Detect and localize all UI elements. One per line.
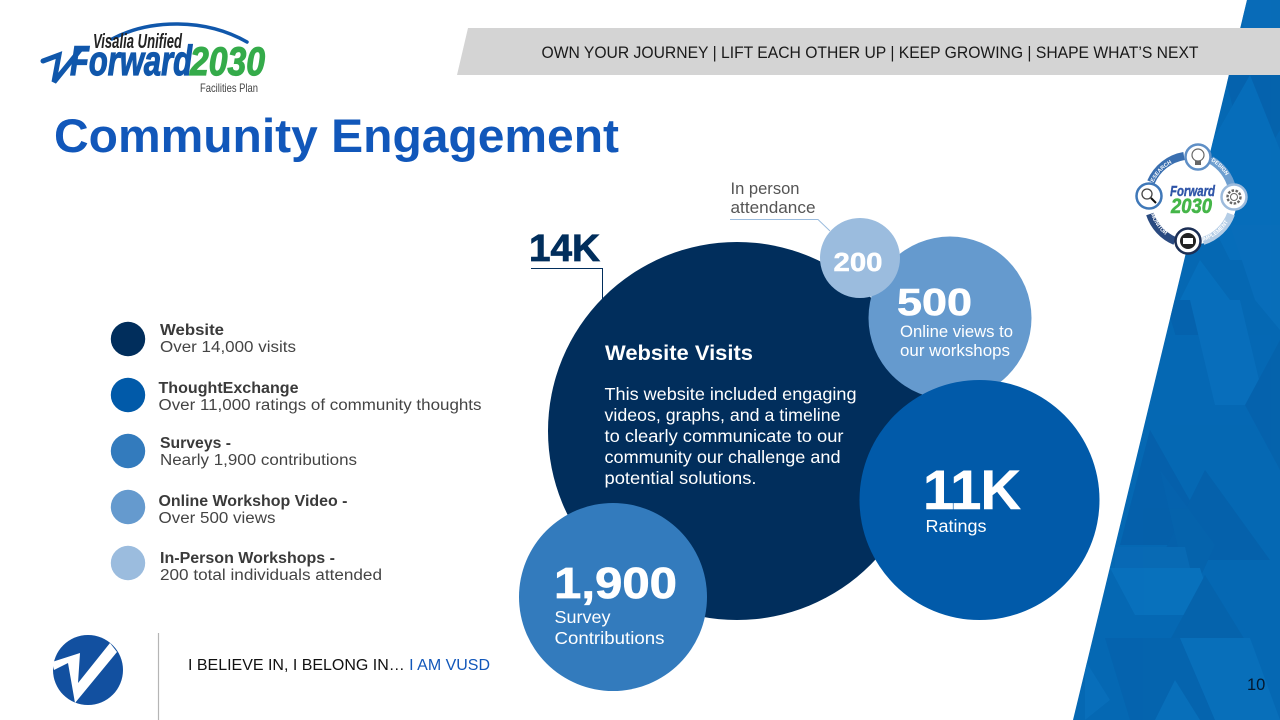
- website visits description: potential solutions.: [604, 468, 756, 488]
- callout: 14K: 14K: [529, 228, 601, 270]
- logo: Visalia Unified Forward2030 Facilities Plan: [43, 24, 265, 95]
- bubble: online views: Online views to: [900, 323, 1013, 341]
- bubble: ratings 11K: [860, 380, 1100, 620]
- website visits description: videos, graphs, and a timeline: [604, 405, 840, 425]
- legend item: in-person workshops: [111, 546, 382, 584]
- bubble: in person attendance 200: 200: [834, 247, 882, 277]
- legend item: website: [111, 322, 296, 356]
- logo: Visalia Unified Forward2030 Facilities Plan: Visalia Unified: [93, 31, 183, 53]
- legend item: surveys: [111, 434, 357, 469]
- magnifier node: [1136, 184, 1162, 208]
- ring labels: [1150, 158, 1229, 241]
- bubble: ratings 11K: 11K: [923, 458, 1021, 521]
- bubble: survey contributions: Survey: [554, 607, 611, 627]
- legend item: in-person workshops: In-Person Workshops -: [160, 550, 335, 567]
- banner: gray motto bar: [457, 28, 1280, 75]
- page number: 10: [1247, 676, 1265, 694]
- callout: in person attendance: attendance: [730, 199, 816, 217]
- bubble: online views: our workshops: [900, 342, 1010, 360]
- gear node: [1222, 184, 1246, 210]
- logo: Visalia Unified Forward2030 Facilities Plan: Facilities Plan: [200, 81, 258, 95]
- bubble: online views: [868, 236, 1032, 400]
- website visits description: community our challenge and: [604, 447, 840, 467]
- legend item: surveys: Surveys -: [160, 435, 231, 452]
- logo: Visalia Unified Forward2030 Facilities Plan: 2030: [189, 40, 265, 84]
- bulb node: [1186, 144, 1210, 170]
- icon: Forward 2030 cycle badge: [1135, 143, 1248, 255]
- legend item: online workshop video: Over 500 views: [158, 510, 276, 527]
- bubble: ratings 11K: Ratings: [926, 516, 987, 536]
- bubble: survey contributions: [519, 503, 707, 691]
- heading: website visits: Website Visits: [605, 342, 753, 365]
- legend item: website: Over 14,000 visits: [160, 339, 296, 356]
- ring labels: IMPLEMENT: [1202, 220, 1228, 241]
- bubble: online views: 500: [897, 282, 972, 324]
- legend item: online workshop video: Online Workshop Video -: [158, 493, 348, 510]
- legend item: in-person workshops: 200 total individuals attended: [160, 567, 382, 584]
- callout: 14K: [529, 228, 602, 345]
- ring labels: MONITOR: [1151, 213, 1168, 235]
- panel: blue triangle pattern background: [1060, 0, 1280, 720]
- legend item: ThoughtExchange: [111, 378, 482, 414]
- website visits description: This website included engaging: [604, 384, 856, 404]
- ring labels: DESIGN: [1211, 158, 1229, 176]
- legend item: ThoughtExchange: Over 11,000 ratings of community thoughts: [158, 397, 482, 414]
- divider: [158, 633, 160, 720]
- legend: [111, 322, 482, 584]
- icon: Forward 2030 cycle badge: Forward: [1170, 183, 1216, 200]
- bubble: in person attendance 200: [820, 218, 900, 298]
- monitor node: [1176, 228, 1200, 254]
- tagline: I BELIEVE IN, I BELONG IN… I AM VUSD: [188, 657, 490, 674]
- legend item: website: Website: [160, 322, 224, 339]
- website visits description: to clearly communicate to our: [604, 426, 844, 446]
- logo: Visalia Unified Forward2030 Facilities Plan: Forward: [70, 37, 193, 84]
- icon: Forward 2030 cycle badge: 2030: [1170, 195, 1212, 218]
- ring labels: RESEARCH: [1150, 160, 1172, 183]
- bubble: survey contributions: Contributions: [554, 628, 665, 648]
- title: Community Engagement: [54, 110, 619, 163]
- callout: in person attendance: In person: [730, 180, 800, 198]
- legend item: ThoughtExchange: ThoughtExchange: [158, 380, 299, 397]
- bubble: survey contributions: 1,900: [554, 559, 677, 608]
- legend item: surveys: Nearly 1,900 contributions: [160, 452, 357, 469]
- banner text: OWN YOUR JOURNEY | LIFT EACH OTHER UP | KEEP GROWING | SHAPE WHAT’S NEXT: [542, 43, 1198, 62]
- legend item: online workshop video: [111, 490, 348, 527]
- callout: in person attendance: [730, 180, 830, 231]
- icon: VUSD logo: [52, 635, 123, 705]
- bubble: website visits: [548, 242, 926, 620]
